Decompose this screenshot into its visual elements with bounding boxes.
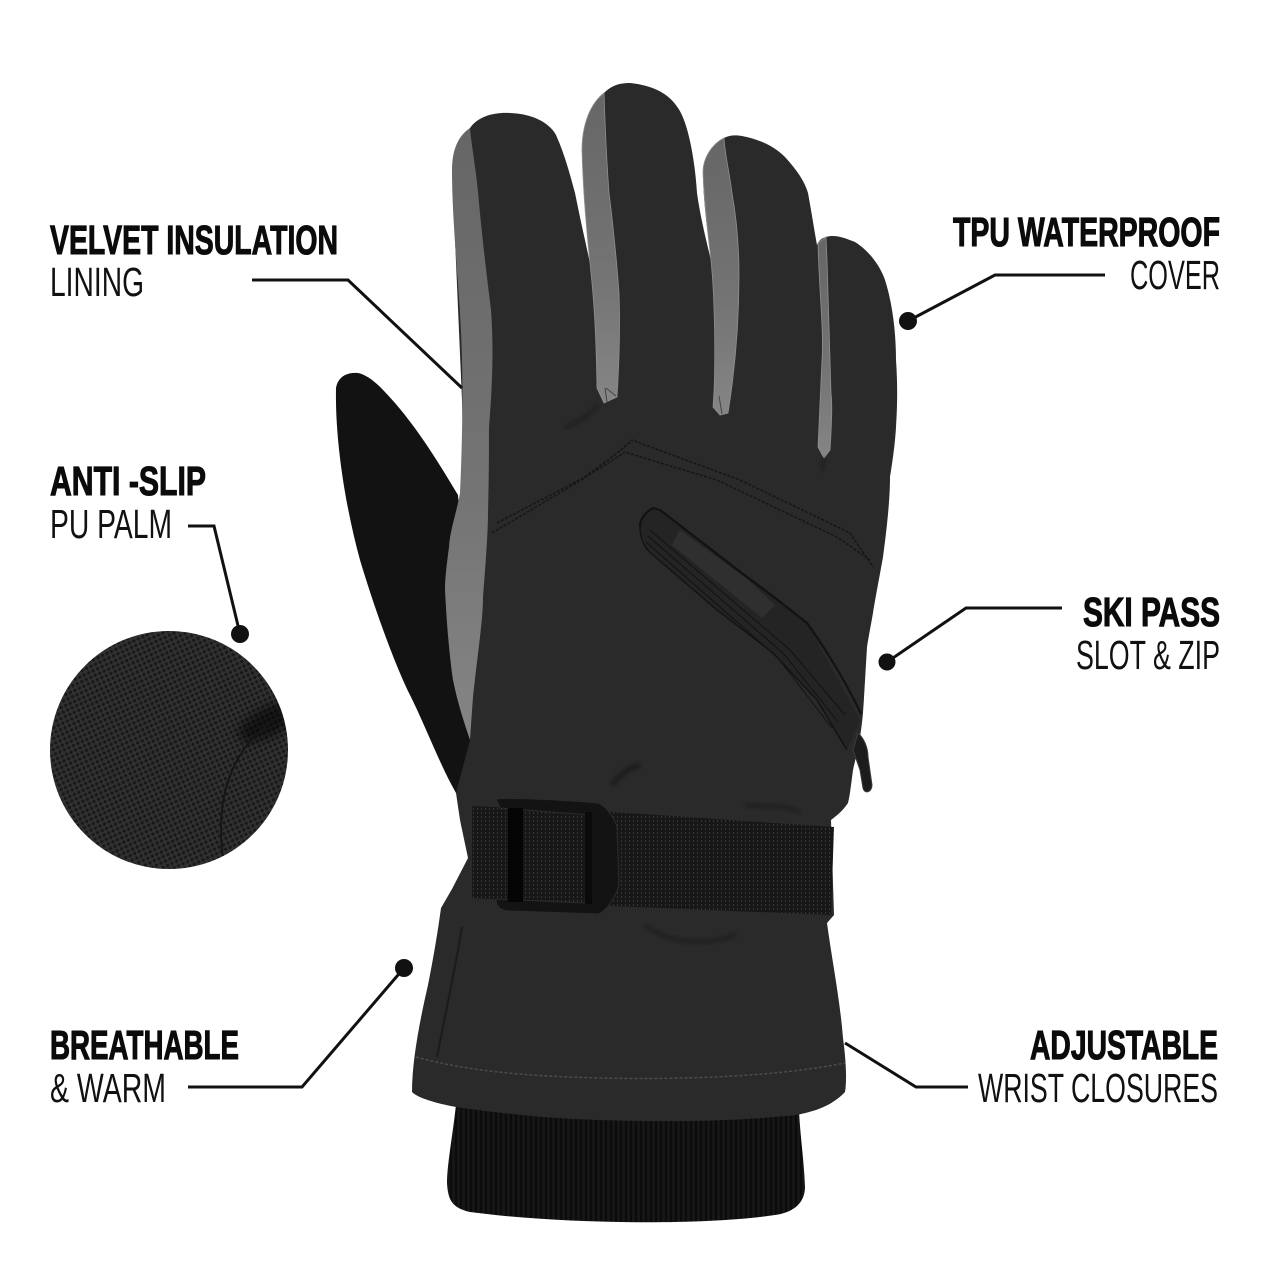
wrist strap — [472, 806, 834, 915]
thumb with palm — [336, 373, 480, 815]
leader: velvet insulation — [252, 280, 462, 388]
label: velvet insulation: VELVET INSULATION — [50, 217, 338, 263]
buckle — [496, 798, 619, 914]
label: ski pass: SKI PASS — [1083, 589, 1220, 635]
label: ski pass — [1076, 589, 1220, 678]
leader: anti-slip — [188, 526, 249, 643]
leader: breathable — [188, 959, 413, 1087]
pocket stitching — [492, 440, 873, 567]
label: anti-slip — [50, 458, 206, 547]
label: TPU waterproof: COVER — [1130, 252, 1220, 298]
gray finger inserts — [582, 93, 832, 458]
label: velvet insulation: LINING — [50, 259, 144, 305]
shell creases — [566, 405, 824, 942]
cuff seam and hem stitching — [416, 927, 845, 1078]
label: breathable — [50, 1022, 239, 1111]
gray lining panel — [445, 128, 492, 740]
label: breathable: BREATHABLE — [50, 1022, 239, 1068]
leader: ski pass — [878, 608, 1062, 670]
glove shell back — [412, 83, 897, 1121]
leader: TPU waterproof — [899, 275, 1105, 330]
detail circle: palm texture — [50, 631, 303, 869]
slit fold shadows — [605, 388, 722, 414]
label: velvet insulation — [50, 217, 338, 305]
knit rib cuff — [447, 1105, 805, 1222]
label: anti-slip: PU PALM — [50, 501, 172, 547]
ski pass zip — [640, 508, 872, 792]
label: anti-slip: ANTI -SLIP — [50, 458, 206, 504]
leader: adjustable — [845, 1043, 968, 1087]
label: TPU waterproof — [953, 209, 1220, 298]
glove illustration — [336, 83, 897, 1222]
zip pull — [853, 733, 872, 792]
label: adjustable — [978, 1022, 1218, 1111]
label: breathable: & WARM — [50, 1065, 166, 1111]
